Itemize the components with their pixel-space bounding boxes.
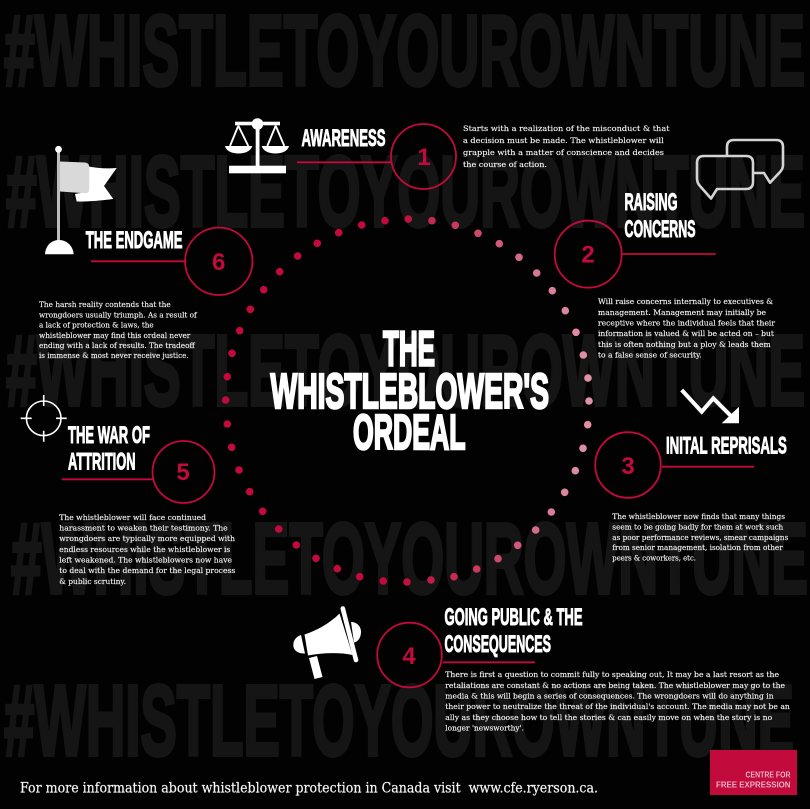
- panel: step 4 going public: [293, 605, 790, 732]
- title: [270, 322, 549, 460]
- description 6: wrongdoers usually triumph. As a result of: [39, 310, 198, 320]
- description 2: information is valued & will be acted on – but: [598, 329, 774, 338]
- description 1: Starts with a realization of the misconduct & that: [463, 124, 670, 133]
- heading: the war of attrition: THE WAR OF: [68, 423, 150, 449]
- heading: raising concerns: RAISING: [624, 190, 678, 216]
- heading: awareness: AWARENESS: [302, 126, 386, 152]
- description 5: [59, 513, 235, 586]
- number circle 2: [555, 221, 622, 288]
- icon: megaphone: [293, 608, 361, 679]
- description 3: as poor performance reviews, smear campaigns: [612, 533, 788, 542]
- description 1: grapple with a matter of conscience and decides: [463, 148, 664, 157]
- description 2: to a false sense of security.: [598, 350, 702, 360]
- description 1: the course of action.: [463, 160, 547, 169]
- logo: centre for free expression: FREE EXPRESSION: [716, 780, 790, 790]
- panel: step 2 raising concerns: [555, 140, 783, 360]
- panel: step 1 awareness: [225, 118, 670, 189]
- description 2: [598, 297, 775, 360]
- icon: flag: [45, 146, 117, 254]
- description 3: from senior management, isolation from other: [612, 543, 783, 552]
- title: ORDEAL: [353, 406, 466, 460]
- icon: downward arrow: [682, 390, 739, 423]
- description 5: to deal with the demand for the legal process: [59, 566, 235, 575]
- icon: scales: [225, 118, 289, 173]
- heading: raising concerns: CONCERNS: [624, 217, 696, 243]
- number circle 4: 4: [402, 643, 416, 670]
- number circle 6: 6: [212, 249, 225, 276]
- title: THE: [383, 322, 435, 376]
- panel: step 5 war of attrition: [21, 395, 235, 586]
- description 5: The whistleblower will face continued: [59, 513, 206, 522]
- icon: crosshair: [21, 395, 67, 442]
- number circle 3: [595, 432, 661, 498]
- description 6: [39, 300, 198, 360]
- description 5: harassment to weaken their testimony. The: [59, 524, 228, 532]
- heading: the war of attrition: [68, 423, 150, 476]
- number circle 2: 2: [581, 242, 595, 269]
- number circle 4: [377, 623, 442, 687]
- description 3: peers & coworkers, etc.: [612, 554, 696, 562]
- description 5: wrongdoers are typically more equipped with: [59, 534, 235, 543]
- description 6: The harsh reality contends that the: [39, 300, 171, 309]
- description 4: ally as they choose how to tell the stories & can easily move on when the story is no: [445, 713, 773, 722]
- description 4: longer 'newsworthy'.: [445, 724, 524, 732]
- heading: going public: CONSEQUENCES: [444, 632, 551, 658]
- description 5: endless resources while the whistleblower is: [59, 545, 230, 554]
- description 2: Will raise concerns internally to executives &: [598, 297, 773, 306]
- number circle 5: 5: [176, 459, 190, 486]
- description 2: management. Management may initially be: [598, 308, 767, 317]
- heading: the war of attrition: ATTRITION: [68, 450, 136, 476]
- description 2: this is often nothing but a ploy & leads them: [598, 340, 771, 349]
- description 3: seem to be going badly for them at work such: [612, 522, 783, 532]
- logo: centre for free expression: CENTRE FOR: [746, 769, 791, 779]
- heading: going public: GOING PUBLIC & THE: [444, 605, 582, 631]
- heading: raising concerns: [624, 190, 696, 243]
- panel: step 6 the endgame: [39, 146, 252, 360]
- panel: step 3 initial reprisals: [595, 390, 788, 562]
- title: WHISTLEBLOWER'S: [270, 365, 549, 419]
- description 5: left weakened. The whistleblowers now have: [59, 556, 232, 564]
- description 5: & public scrutiny.: [59, 577, 126, 586]
- description 1: [463, 124, 670, 169]
- dotted circle: [222, 215, 593, 586]
- number circle 5: [152, 441, 214, 503]
- description 4: [445, 670, 790, 732]
- description 6: is immense & most never receive justice.: [39, 351, 189, 360]
- footer text: For more information about whistleblower protection in Canada visit www.cfe.ryerson.ca.: [20, 781, 598, 797]
- description 3: The whistleblower now finds that many things: [612, 512, 785, 521]
- number circle 1: 1: [417, 144, 431, 171]
- description 6: whistleblower may find this ordeal never: [39, 331, 191, 340]
- number circle 1: [391, 124, 456, 189]
- description 4: media & this will begin a series of consequences. The wrongdoers will do anything in: [445, 692, 774, 700]
- icon: speech bubbles: [697, 140, 783, 198]
- description 2: receptive where the individual feels that their: [598, 318, 775, 328]
- heading: the endgame: THE ENDGAME: [86, 228, 182, 254]
- description 6: ending with a lack of results. The tradeoff: [39, 341, 195, 350]
- description 4: retaliations are constant & no actions are being taken. The whistleblower may go to the: [445, 681, 785, 690]
- description 4: their power to neutralize the threat of the individual's account. The media may not be an: [445, 702, 790, 711]
- description 3: [612, 512, 788, 562]
- description 4: There is first a question to commit fully to speaking out, It may be a last resort as the: [445, 670, 780, 679]
- description 1: a decision must be made. The whistleblower will: [463, 136, 664, 145]
- heading: going public: [444, 605, 582, 658]
- number circle 3: 3: [621, 453, 635, 480]
- description 6: a lack of protection & laws, the: [39, 320, 154, 330]
- number circle 6: [185, 228, 252, 295]
- logo: centre for free expression: [710, 750, 797, 795]
